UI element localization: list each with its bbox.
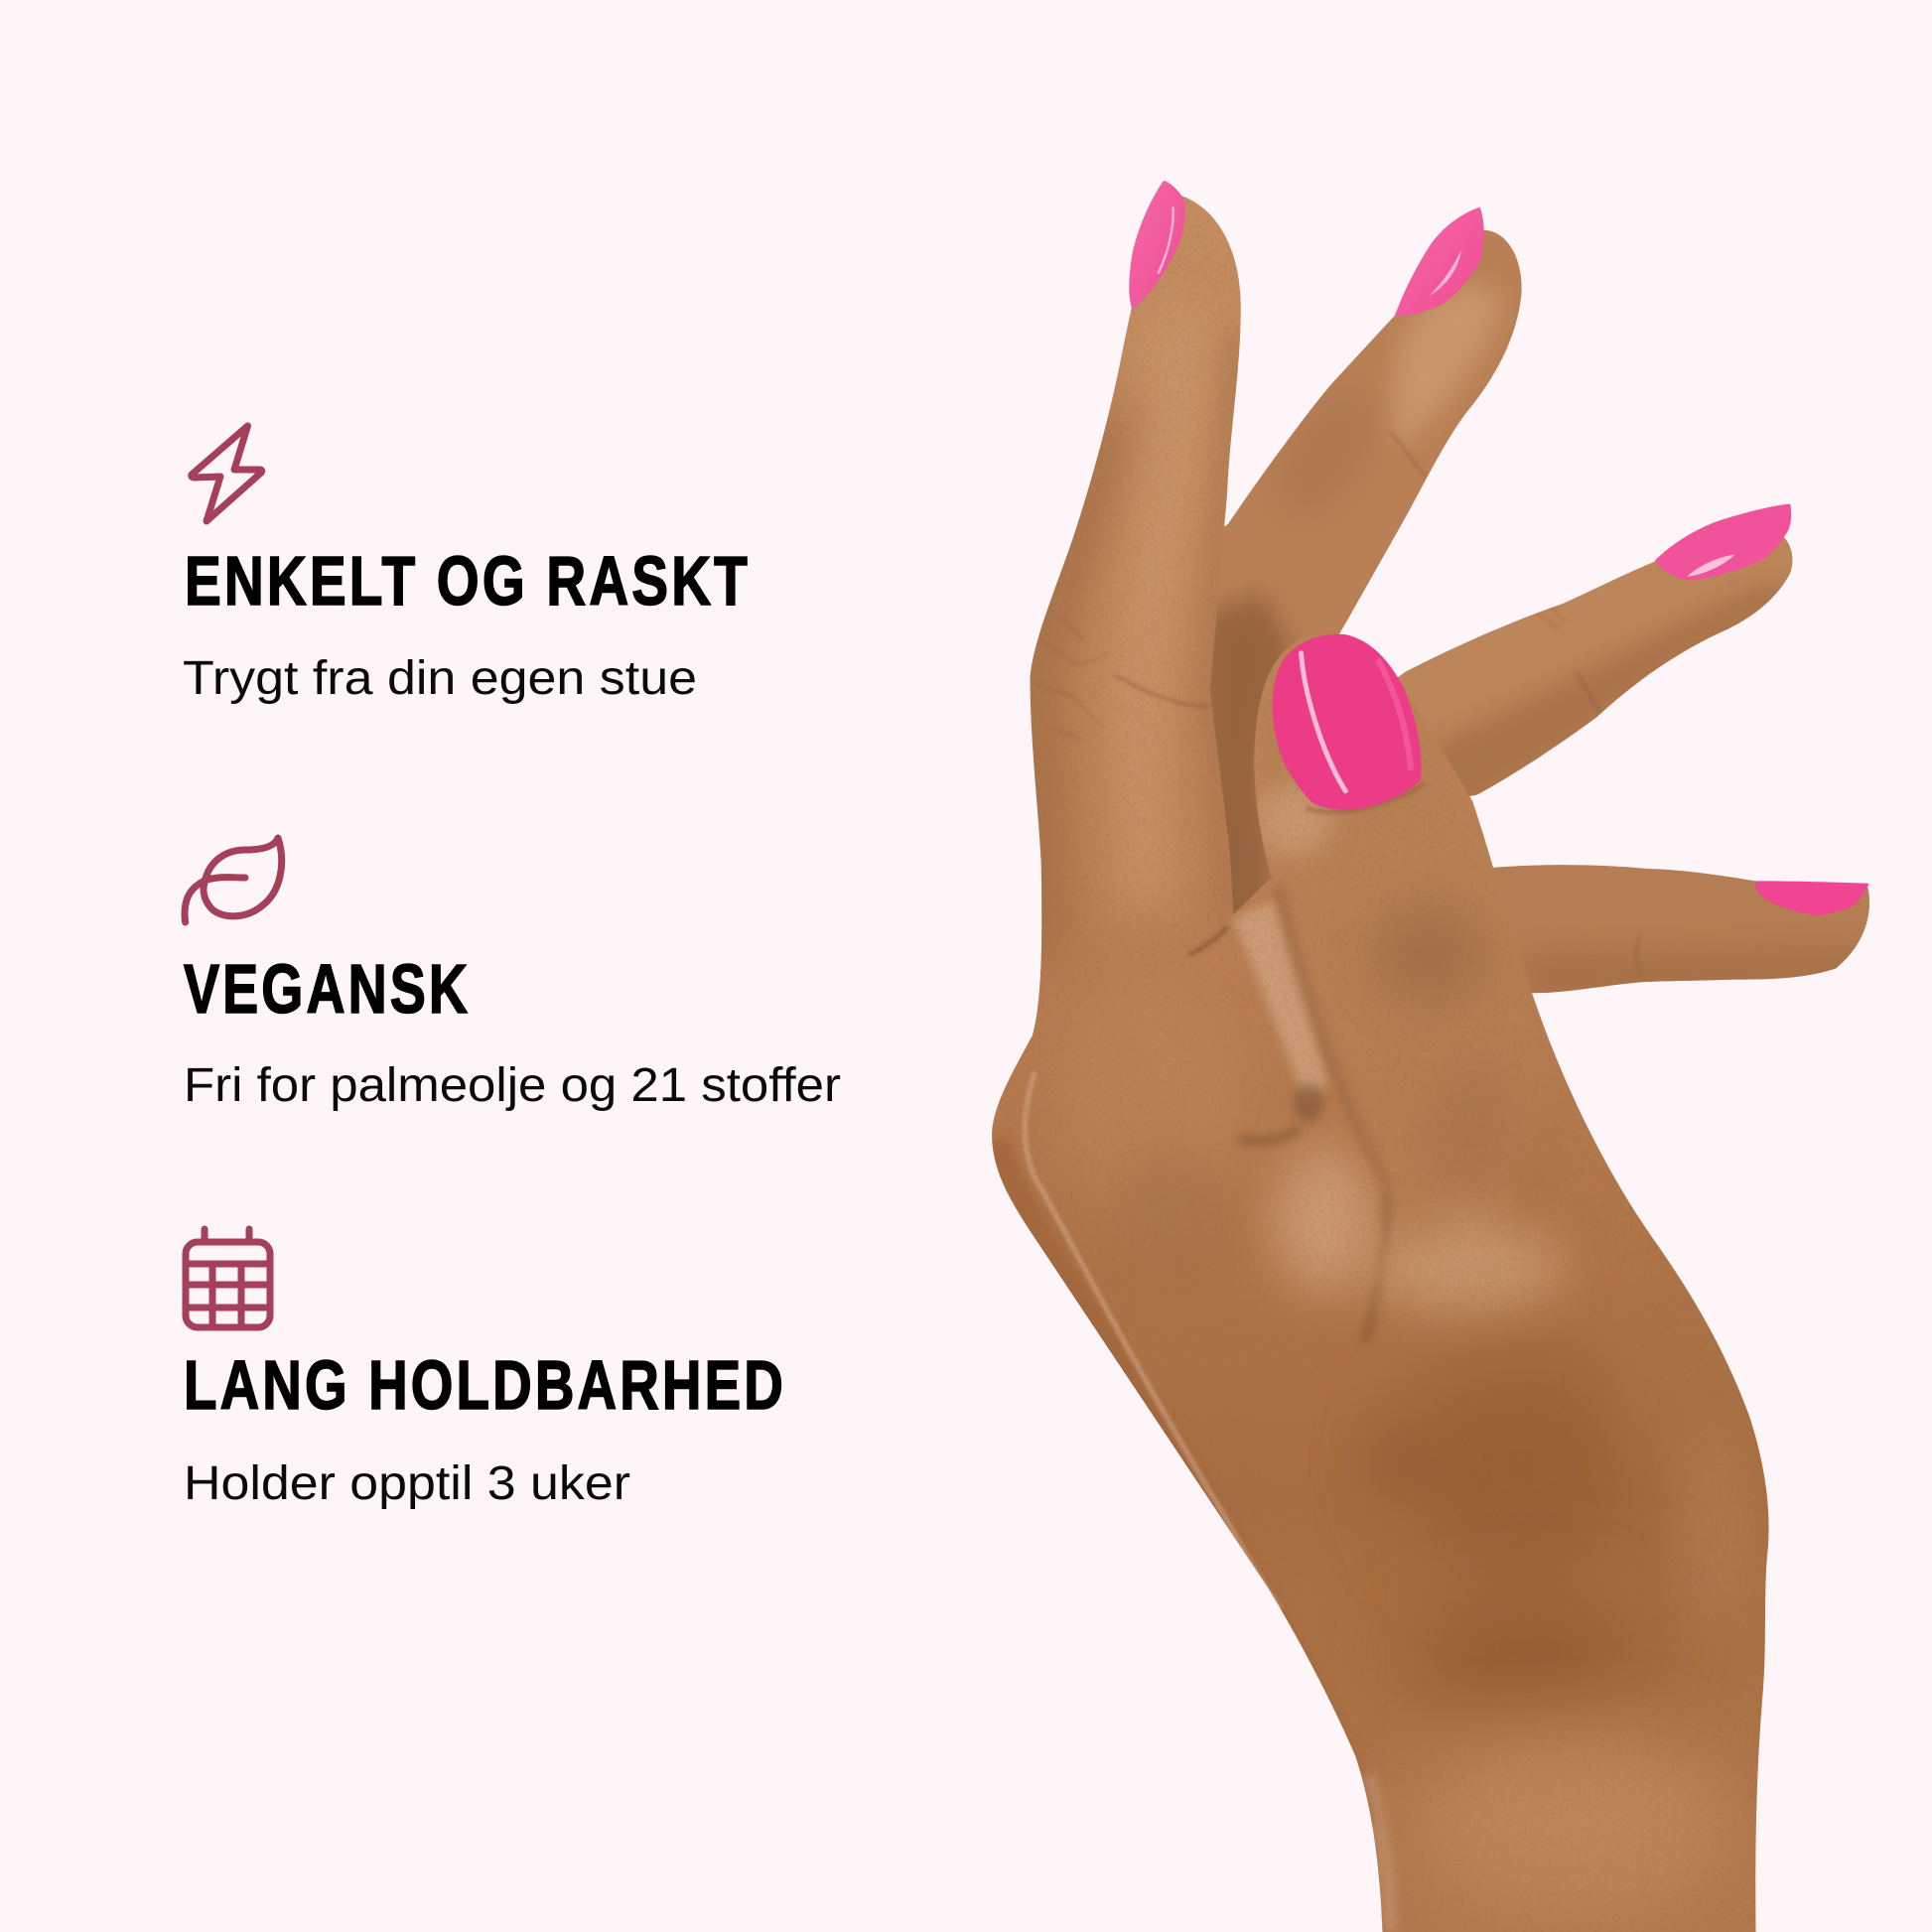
illustration: hand with pink nails — [973, 173, 1885, 1932]
nail: middle finger — [1395, 207, 1484, 316]
right edge tone — [1680, 1423, 1758, 1632]
dark spot — [1356, 1430, 1443, 1491]
wrinkles: knuckle — [1078, 654, 1104, 725]
nail highlight: thumb — [1302, 653, 1345, 791]
little finger with nail — [1493, 865, 1869, 993]
heading: enkelt og raskt: ENKELT OG RASKT — [185, 542, 751, 620]
crease: base of index finger — [1115, 675, 1211, 706]
index finger shadow right — [1207, 333, 1236, 924]
wrist light — [1417, 1737, 1737, 1910]
back of hand light band — [1368, 1222, 1565, 1315]
thumb knuckle shade — [1378, 908, 1481, 1002]
palm darker tone — [1103, 1152, 1238, 1288]
middle finger with nail — [1209, 207, 1522, 914]
wrist left highlight — [1368, 1774, 1390, 1932]
thumb body tone — [1257, 640, 1559, 1257]
thumb base fold — [1365, 1189, 1387, 1343]
thumb tip highlight — [1254, 782, 1333, 857]
fold between palm and thumb — [1232, 899, 1328, 1100]
index finger shadow left — [1033, 407, 1109, 961]
nail: index finger — [1129, 181, 1185, 310]
index finger highlight — [1140, 308, 1182, 911]
feature: enkelt og raskt — [183, 426, 751, 705]
thumb mid shade — [1431, 1063, 1517, 1199]
nail: little finger — [1755, 881, 1869, 915]
infographic canvas — [181, 181, 1869, 1932]
left hand edge highlight — [1025, 1072, 1280, 1609]
text: fri for palmeolje og 21 stoffer: Fri for palmeolje og 21 stoffer — [184, 1059, 841, 1112]
feature: lang holdbarhed — [184, 1229, 786, 1510]
thumb nail cuticle shade — [1307, 783, 1425, 812]
back of hand shadow — [1399, 1349, 1645, 1584]
nail highlight: index finger — [1159, 207, 1173, 274]
heading: vegansk: VEGANSK — [184, 950, 471, 1028]
upper right tendon tone — [1614, 1294, 1737, 1491]
ring finger with nail — [1398, 504, 1793, 796]
left hand edge shadow — [996, 1140, 1368, 1824]
thenar highlight — [1273, 1146, 1376, 1294]
highlight: ring nail — [1687, 554, 1734, 577]
palm lump shading — [1294, 1083, 1323, 1123]
icon: calendar — [186, 1229, 270, 1327]
highlight: middle nail — [1430, 250, 1461, 296]
icon: leaf — [185, 838, 282, 922]
thumb-palm boundary — [1279, 888, 1386, 1182]
skin texture — [973, 173, 1787, 1932]
text: trygt fra din egen stue: Trygt fra din egen stue — [183, 652, 697, 705]
text: holder opptil 3 uker: Holder opptil 3 uker — [184, 1457, 630, 1510]
crease: lower index finger — [1189, 926, 1227, 955]
heading: lang holdbarhed: LANG HOLDBARHED — [184, 1346, 786, 1424]
feature: vegansk — [184, 838, 841, 1112]
nail: ring finger — [1655, 504, 1791, 581]
palm, index finger and thumb — [973, 173, 1787, 1932]
nail: thumb — [1273, 634, 1421, 809]
palm crease — [1238, 1128, 1300, 1141]
palm soft tone — [1091, 1106, 1207, 1170]
wrist shadow band — [1399, 1605, 1657, 1709]
icon: lightning bolt — [192, 426, 262, 521]
nail side reflection: thumb — [1378, 659, 1411, 770]
